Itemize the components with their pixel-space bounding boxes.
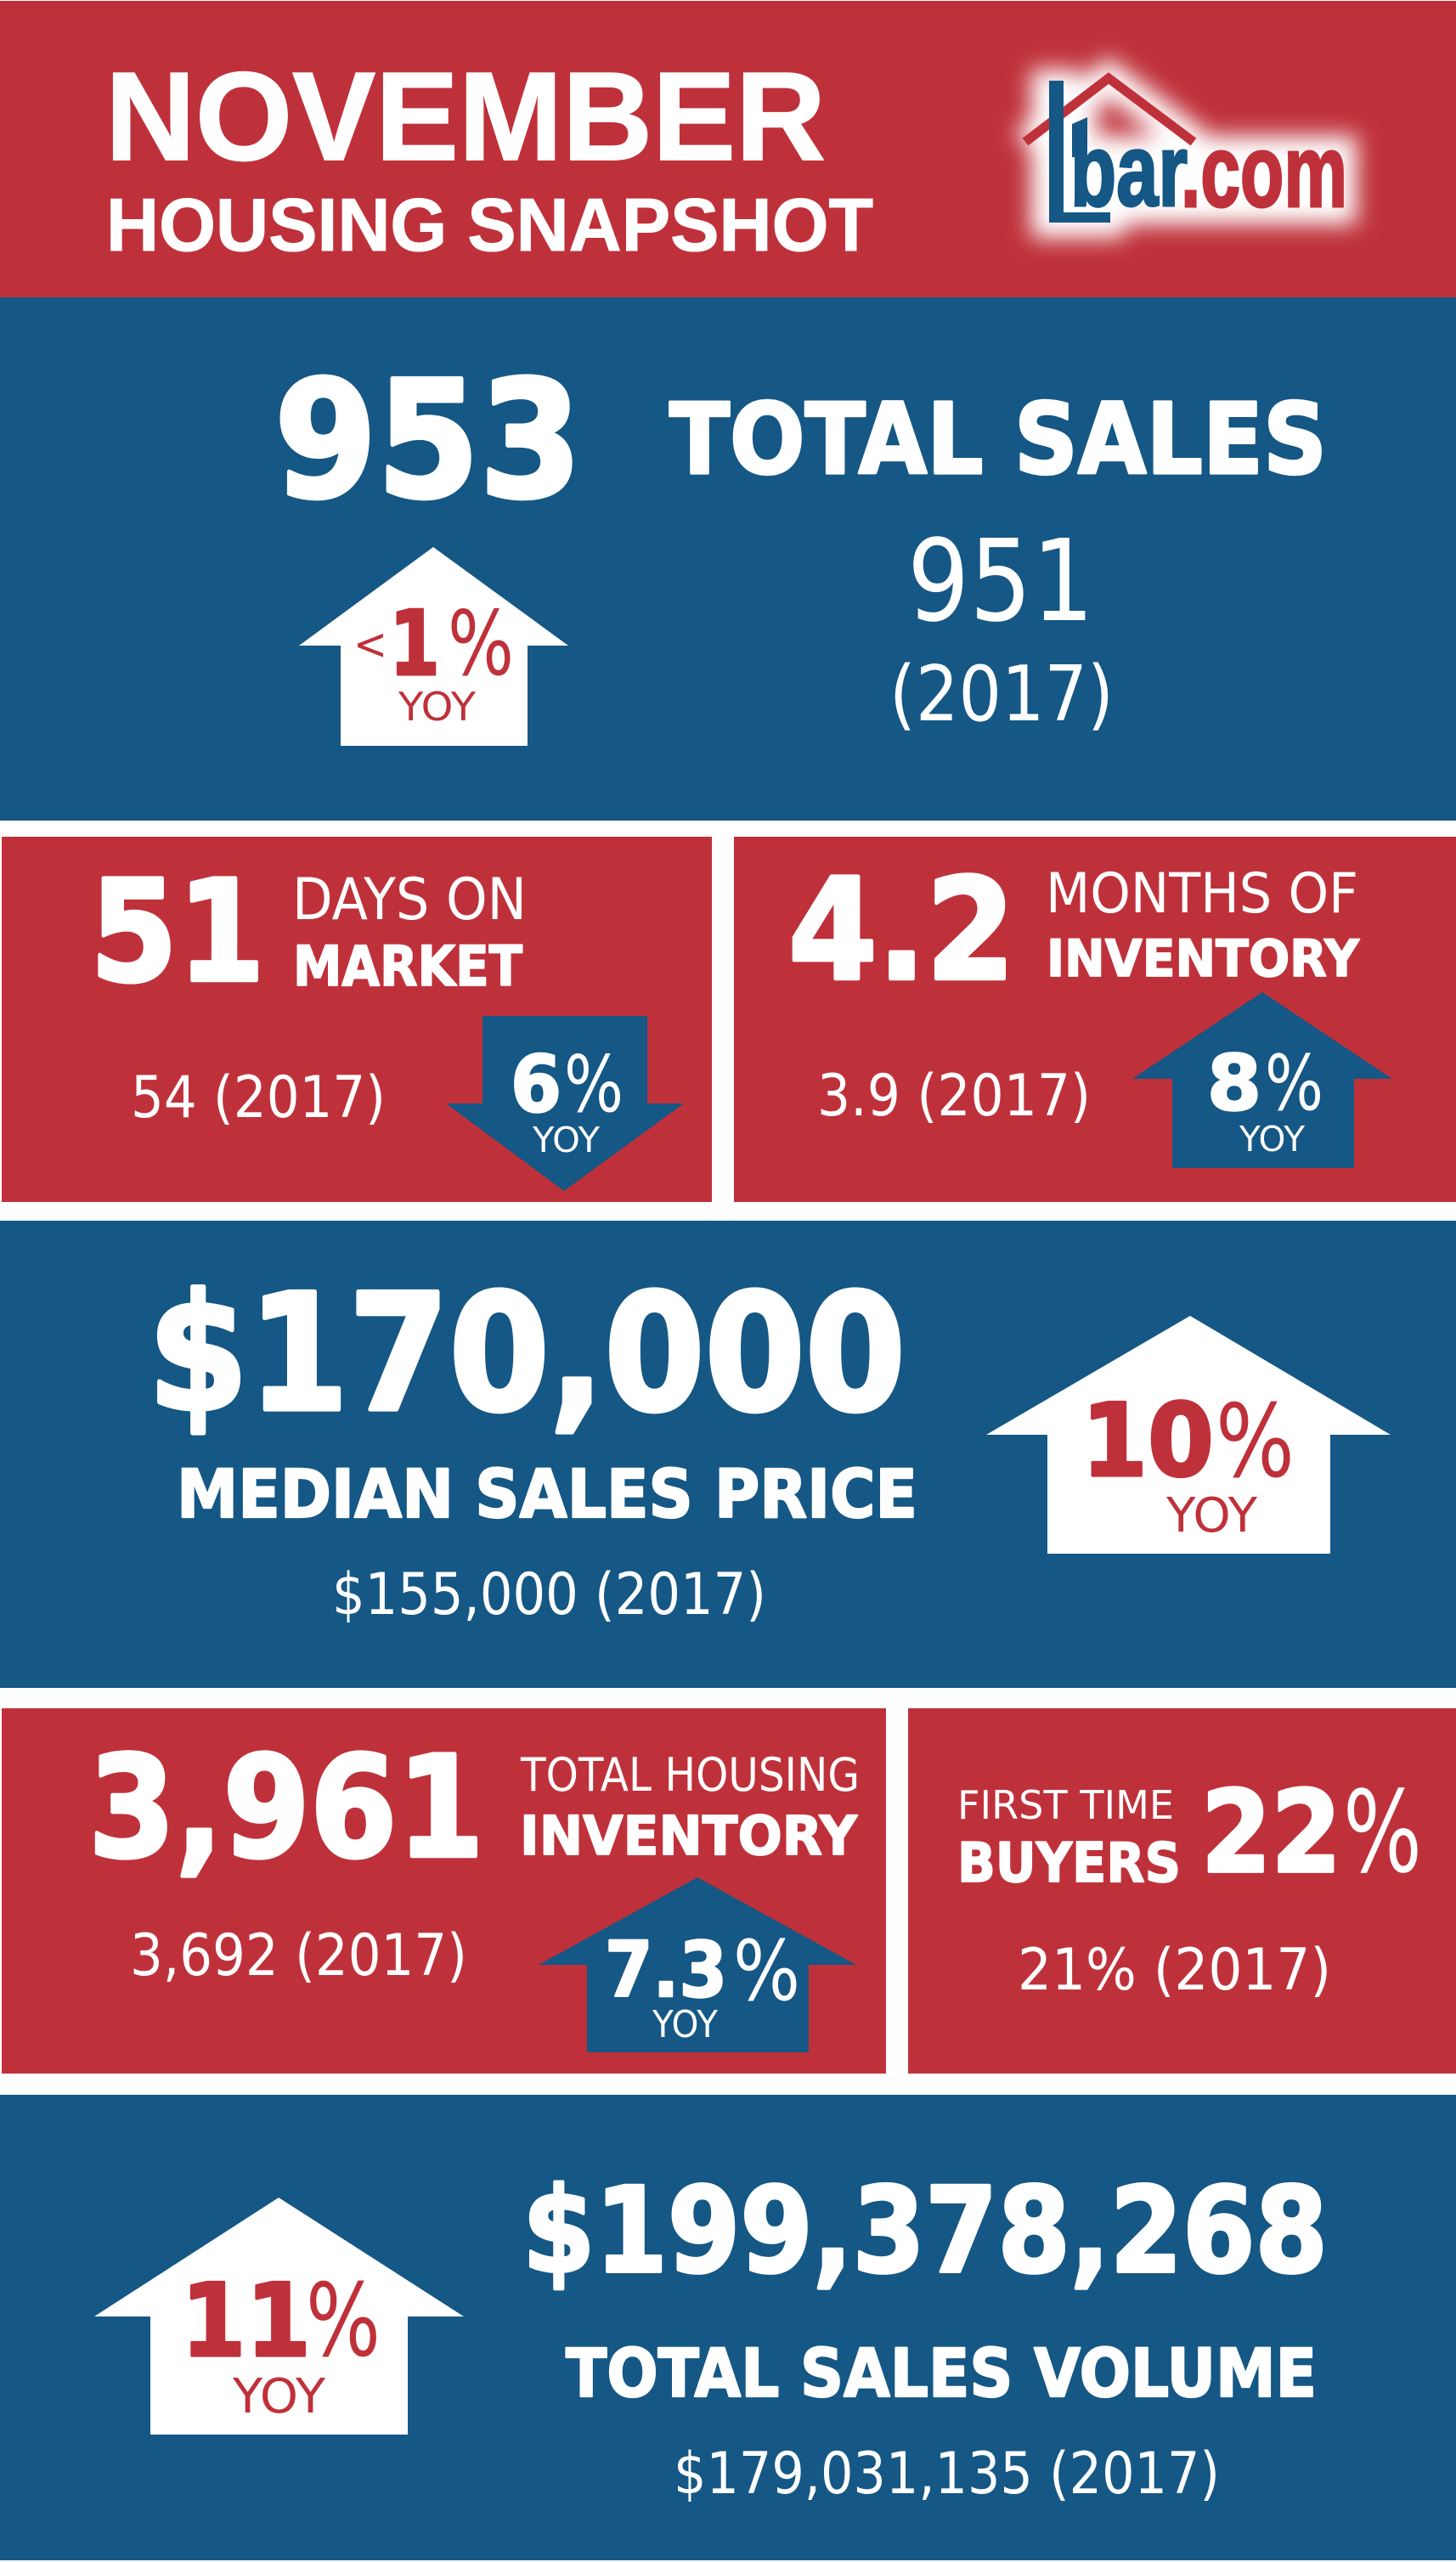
arrow: up 8 percent	[1132, 992, 1392, 1168]
prior value: 3.9: 3.9 (2017)	[817, 1063, 1091, 1130]
logo: Lbar.com: bar	[1070, 112, 1188, 228]
arrow: up 11 percent: %	[306, 2263, 381, 2380]
label: days on: DAYS ON	[292, 866, 527, 934]
arrow: up 11 percent: 11	[181, 2263, 311, 2380]
prior value: 951: 951	[907, 516, 1094, 647]
arrow: down 6 percent	[446, 1016, 684, 1191]
prior value: $155,000: $155,000 (2017)	[332, 1561, 766, 1628]
label: market: MARKET	[293, 935, 522, 999]
arrow: up 7.3 percent: %	[733, 1923, 800, 2020]
arrow: up less than 1 percent: %	[448, 592, 514, 696]
label: median sales price: MEDIAN SALES PRICE	[177, 1457, 917, 1533]
prior value: 54: 54 (2017)	[131, 1064, 386, 1131]
prior value: 21 percent: 21% (2017)	[1018, 1937, 1331, 2004]
label: inventory: INVENTORY	[1047, 929, 1360, 989]
arrow: up 7.3 percent	[539, 1877, 856, 2052]
arrow: up 11 percent	[94, 2198, 464, 2435]
label: total sales: TOTAL SALES	[669, 383, 1327, 497]
title: November: NOVEMBER	[105, 47, 826, 187]
value: $199,378,268: $199,378,268	[522, 2162, 1328, 2300]
prior value: $179,031,135: $179,031,135 (2017)	[674, 2441, 1220, 2508]
label: inventory: INVENTORY	[520, 1805, 858, 1867]
value: 51: 51	[90, 850, 265, 1013]
arrow: up 7.3 percent: 7.3	[605, 1926, 727, 2015]
arrow: up 7.3 percent: YOY	[652, 2003, 718, 2046]
value: 4.2: 4.2	[788, 849, 1015, 1012]
panel: total housing inventory	[2, 1708, 886, 2074]
label: total sales volume: TOTAL SALES VOLUME	[566, 2336, 1317, 2412]
label: buyers: BUYERS	[957, 1832, 1181, 1895]
value: $170,000: $170,000	[148, 1260, 906, 1447]
label: first time: FIRST TIME	[957, 1782, 1174, 1828]
arrow: up 10 percent: %	[1216, 1384, 1295, 1501]
arrow: up less than 1 percent: YOY	[398, 684, 477, 730]
arrow: down 6 percent: %	[564, 1039, 624, 1130]
arrow: up 8 percent: 8	[1207, 1039, 1261, 1128]
subtitle: Housing Snapshot: HOUSING SNAPSHOT	[106, 183, 873, 267]
label: total housing: TOTAL HOUSING	[520, 1748, 860, 1802]
value: 22 percent: 22	[1201, 1768, 1341, 1899]
prior value: 3,692: 3,692 (2017)	[130, 1922, 467, 1989]
arrow: up 10 percent: YOY	[1165, 1488, 1258, 1543]
arrow: up 10 percent: 10	[1081, 1383, 1214, 1500]
panel: median sales price	[0, 1221, 1456, 1688]
panel: months of inventory	[734, 837, 1456, 1202]
arrow: up less than 1 percent: 1	[389, 592, 440, 696]
arrow: down 6 percent: 6	[511, 1039, 562, 1130]
value: 953: 953	[274, 347, 582, 534]
value: 22 percent: %	[1343, 1768, 1422, 1899]
arrow: up 10 percent	[986, 1316, 1391, 1554]
arrow: up less than 1 percent	[299, 547, 568, 746]
panel: first time buyers	[908, 1708, 1456, 2074]
logo: Lbar.com	[1025, 70, 1357, 238]
arrow: up 8 percent: YOY	[1239, 1119, 1306, 1160]
panel: days on market	[2, 837, 712, 1202]
arrow: up 11 percent: YOY	[232, 2369, 326, 2424]
panel: header	[0, 1, 1456, 297]
label: months of: MONTHS OF	[1046, 862, 1358, 926]
panel: total sales	[0, 297, 1456, 821]
arrow: up less than 1 percent: <	[353, 619, 387, 670]
arrow: up 8 percent: %	[1265, 1039, 1323, 1128]
prior year: 2017: (2017)	[889, 650, 1114, 739]
logo: Lbar.com: .com	[1181, 113, 1347, 229]
value: 3,961: 3,961	[88, 1726, 484, 1889]
arrow: down 6 percent: YOY	[532, 1120, 601, 1160]
panel: total sales volume	[0, 2095, 1456, 2560]
